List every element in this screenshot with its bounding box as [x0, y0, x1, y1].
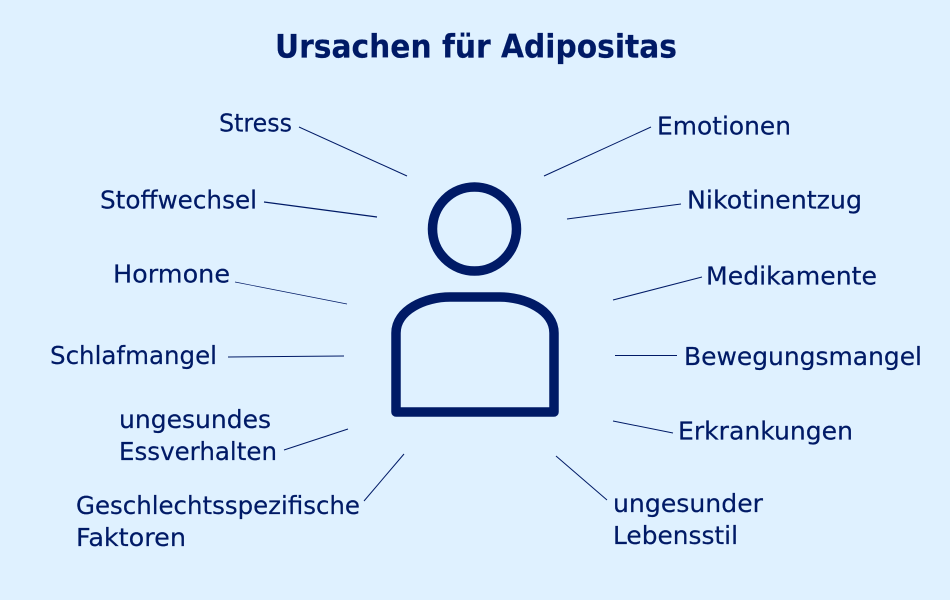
- cause: Bewegungsmangel: Bewegungsmangel: [684, 342, 922, 371]
- cause: ungesundes Essverhalten: Essverhalten: [119, 437, 277, 466]
- cause: Geschlechtsspezifische Faktoren: Geschlechtsspezifische: [76, 491, 360, 520]
- cause: Nikotinentzug: Nikotinentzug: [687, 186, 862, 214]
- cause: Emotionen: Emotionen: [657, 112, 791, 140]
- cause: Geschlechtsspezifische Faktoren: Faktoren: [76, 523, 186, 552]
- cause: Nikotinentzug: [567, 186, 862, 219]
- cause: ungesundes Essverhalten: [119, 405, 348, 466]
- cause: Emotionen: [544, 112, 791, 176]
- cause: ungesunder Lebensstil: Lebensstil: [613, 521, 738, 550]
- title: Ursachen für Adipositas: [275, 28, 677, 66]
- cause: ungesunder Lebensstil: ungesunder: [613, 489, 764, 518]
- cause: Stoffwechsel: Stoffwechsel: [100, 186, 257, 214]
- cause: Schlafmangel: Schlafmangel: [50, 341, 217, 370]
- cause: Hormone: [113, 260, 347, 304]
- cause: ungesunder Lebensstil: [556, 456, 764, 550]
- cause: Medikamente: [613, 262, 877, 300]
- cause: Stress: [219, 108, 407, 176]
- cause: Stress: Stress: [219, 108, 292, 138]
- icon: person: [396, 187, 554, 412]
- cause: Medikamente: Medikamente: [706, 262, 877, 290]
- cause: Geschlechtsspezifische Faktoren: [76, 454, 404, 552]
- cause: Stoffwechsel: [100, 186, 377, 217]
- cause: Hormone: Hormone: [113, 260, 230, 288]
- cause: ungesundes Essverhalten: ungesundes: [119, 405, 271, 434]
- cause: Erkrankungen: Erkrankungen: [678, 416, 853, 446]
